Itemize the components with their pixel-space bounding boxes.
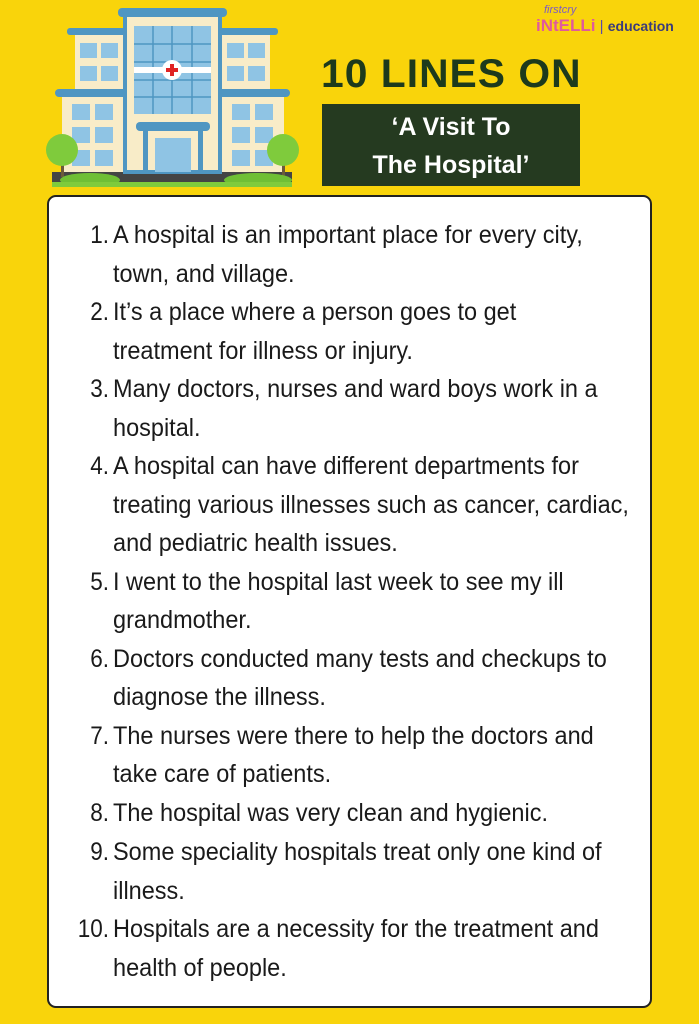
panel: ten lines list: take care of patients. — [113, 760, 331, 788]
panel: ten lines list: Hospitals are a necessity for the treatment and — [113, 915, 599, 943]
subtitle box — [322, 104, 580, 186]
panel: ten lines list: The nurses were there to help the doctors and — [113, 722, 594, 750]
panel: ten lines list: I went to the hospital last week to see my ill — [113, 568, 564, 596]
panel: ten lines list — [47, 195, 652, 1008]
panel: ten lines list: The hospital was very clean and hygienic. — [113, 799, 548, 827]
subtitle box: The Hospital’ — [373, 151, 529, 179]
logo — [536, 4, 674, 35]
logo: | education — [600, 18, 674, 35]
panel: ten lines list: 3. — [90, 375, 109, 403]
panel: ten lines list: treating various illnesses such as cancer, cardiac, — [113, 490, 629, 518]
panel: ten lines list: Many doctors, nurses and ward boys work in a — [113, 375, 598, 403]
panel: ten lines list: illness. — [113, 876, 185, 904]
panel: ten lines list: 2. — [90, 298, 109, 326]
panel: ten lines list: 8. — [90, 799, 109, 827]
panel: ten lines list: A hospital can have different departments for — [113, 452, 579, 480]
title: 10 LINES ON — [321, 52, 582, 96]
panel: ten lines list: 4. — [90, 452, 109, 480]
panel: ten lines list: and pediatric health issues. — [113, 529, 398, 557]
subtitle box: ‘A Visit To — [392, 113, 510, 141]
panel: ten lines list: 7. — [90, 722, 109, 750]
panel: ten lines list: health of people. — [113, 954, 287, 982]
panel: ten lines list: diagnose the illness. — [113, 683, 326, 711]
panel: ten lines list: 5. — [90, 568, 109, 596]
panel: ten lines list: It’s a place where a person goes to get — [113, 298, 516, 326]
panel: ten lines list: 10. — [78, 915, 109, 943]
panel: ten lines list: grandmother. — [113, 606, 251, 634]
panel: ten lines list: 1. — [90, 221, 109, 249]
panel: ten lines list: Doctors conducted many tests and checkups to — [113, 644, 607, 672]
panel: ten lines list: A hospital is an important place for every city, — [113, 221, 583, 249]
icon: hospital building — [46, 8, 299, 187]
logo: iNtELLi — [536, 16, 596, 35]
panel: ten lines list: hospital. — [113, 414, 201, 442]
panel: ten lines list: Some speciality hospitals treat only one kind of — [113, 838, 602, 866]
panel: ten lines list: treatment for illness or injury. — [113, 336, 413, 364]
panel: ten lines list: 9. — [90, 838, 109, 866]
logo: firstcry — [544, 4, 576, 16]
panel: ten lines list: 6. — [90, 644, 109, 672]
panel: ten lines list: town, and village. — [113, 260, 295, 288]
